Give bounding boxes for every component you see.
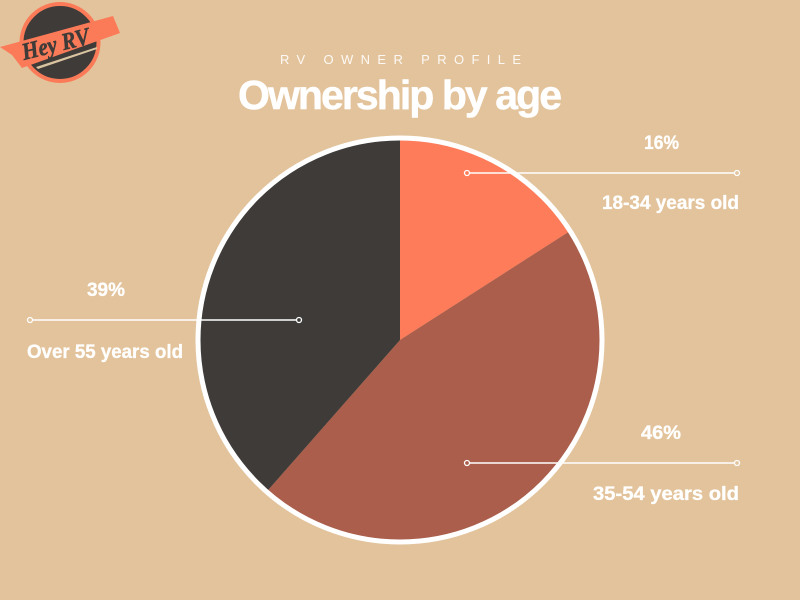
- title: Ownership by age: [238, 72, 562, 118]
- slice: 18-34 years old, 16%: [400, 138, 570, 340]
- logo ribbon shadow: [36, 47, 97, 69]
- logo ribbon: [0, 16, 120, 68]
- value: 46%: 46%: [641, 423, 681, 444]
- value: 39%: 39%: [87, 280, 125, 301]
- pie chart: [198, 138, 602, 542]
- logo: Hey RV: [0, 4, 120, 81]
- pie outline: [198, 138, 602, 542]
- logo circle: [22, 4, 98, 81]
- slice: over 55 years old, 39%: [198, 138, 400, 492]
- leader line: [464, 170, 740, 176]
- value: 16%: 16%: [644, 133, 679, 154]
- label: 18-34 years old: [602, 193, 739, 214]
- callout: over 55 years old: [27, 280, 302, 363]
- label: 35-54 years old: [593, 484, 739, 505]
- logo text: Hey RV: [18, 23, 94, 66]
- slice: 35-54 years old, 46%: [267, 231, 602, 542]
- leader line: [464, 460, 740, 466]
- callout: 18-34 years old: [464, 133, 740, 214]
- leader line: [28, 318, 302, 322]
- subtitle: RV OWNER PROFILE: [280, 52, 521, 67]
- label: Over 55 years old: [27, 342, 183, 363]
- callout: 35-54 years old: [464, 423, 740, 505]
